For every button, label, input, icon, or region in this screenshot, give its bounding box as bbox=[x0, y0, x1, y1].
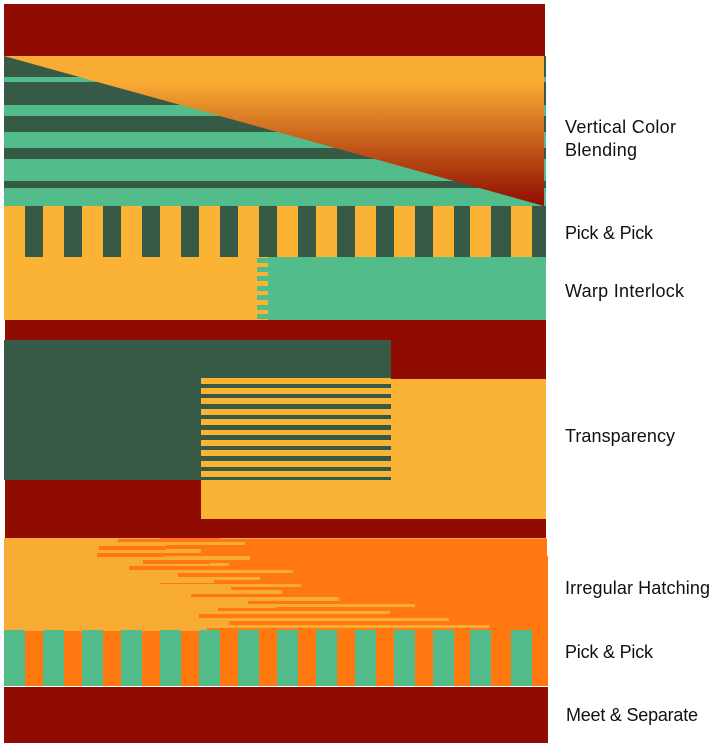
horizontal green stripes bbox=[4, 56, 546, 206]
panel: vertical color blending bbox=[4, 56, 546, 206]
bottom red band: meet and separate bbox=[4, 687, 548, 743]
label: vertical color blending: Blending bbox=[565, 140, 637, 160]
label: pick and pick second: Pick & Pick bbox=[565, 642, 654, 662]
panel: irregular hatching bbox=[4, 538, 548, 631]
panel: warp interlock bbox=[4, 257, 546, 320]
label: irregular hatching: Irregular Hatching bbox=[565, 578, 710, 598]
panel: pick and pick dark green bbox=[4, 206, 546, 257]
panel: transparency bbox=[4, 320, 546, 538]
label: vertical color blending bbox=[565, 117, 676, 160]
panel: pick and pick green bbox=[4, 630, 548, 686]
top red band bbox=[4, 4, 545, 56]
label: pick and pick: Pick & Pick bbox=[565, 223, 654, 243]
label: warp interlock: Warp Interlock bbox=[565, 281, 685, 301]
label: meet and separate: Meet & Separate bbox=[566, 705, 698, 725]
label: vertical color blending: Vertical Color bbox=[565, 117, 676, 137]
label: transparency: Transparency bbox=[565, 426, 675, 446]
gradient triangle bbox=[4, 56, 544, 206]
